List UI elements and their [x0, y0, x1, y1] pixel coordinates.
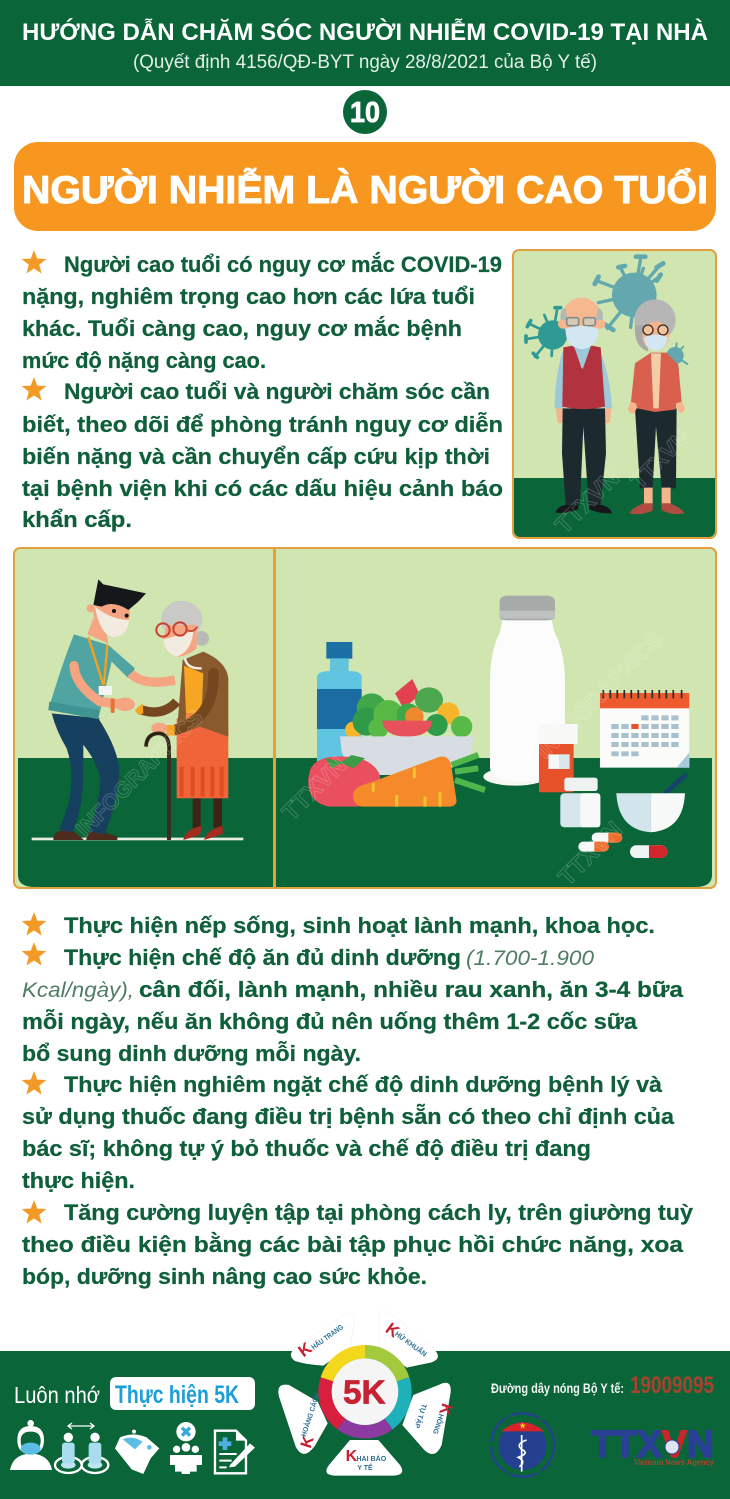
- pill bottle: [560, 778, 600, 827]
- tomato and carrot: [308, 755, 485, 807]
- star bullet: [22, 1071, 46, 1094]
- wheel ring: [325, 1352, 405, 1432]
- advice text block: cân đối, lành mạnh, nhiều rau xanh, ăn 3-4 bữa: [139, 977, 684, 1002]
- hotline: Đường dây nóng Bộ Y tế:: [491, 1380, 624, 1396]
- watermarks: INFOGRAPHICS: [531, 627, 668, 764]
- subtitle: (Quyết định 4156/QĐ-BYT ngày 28/8/2021 của Bộ Y tế): [133, 52, 597, 73]
- milk bottle: [483, 596, 565, 786]
- advice text block: Thực hiện nếp sống, sinh hoạt lành mạnh, khoa học.: [64, 913, 655, 938]
- section banner: [14, 142, 716, 231]
- star bullet: [22, 250, 46, 274]
- petal: Không tụ tập: HÔNG: [431, 1413, 446, 1435]
- mortar and pestle: [616, 776, 685, 832]
- footer band: [0, 1351, 730, 1499]
- panel: elderly couple: [513, 250, 716, 538]
- petal: Khoảng cách: K: [298, 1434, 318, 1450]
- virus right: [666, 343, 687, 370]
- advice text block: (1.700-1.900: [466, 947, 594, 970]
- petal: Khai báo y tế: [326, 1440, 402, 1476]
- icon: hand washing: [115, 1430, 159, 1474]
- logo: TTXVN: Vietnam News Agency: [634, 1458, 715, 1467]
- petal: Khoảng cách: [278, 1385, 328, 1454]
- virus left: [526, 308, 567, 357]
- grandmother: [628, 299, 685, 514]
- main title: HƯỚNG DẪN CHĂM SÓC NGƯỜI NHIỄM COVID-19 TẠI NHÀ: [22, 17, 708, 46]
- advice text block: Thực hiện nghiêm ngặt chế độ dinh dưỡng bệnh lý và: [64, 1072, 662, 1097]
- star bullet: [22, 942, 46, 966]
- petal: Không tụ tập: TỤ TẬP: [413, 1403, 429, 1430]
- star bullet: [22, 1200, 46, 1224]
- salad bowl: [340, 679, 473, 775]
- intro text block: Người cao tuổi và người chăm sóc cần: [64, 379, 490, 404]
- watermarks: TTXVN: [550, 465, 625, 539]
- petal: Khai báo y tế: HAI BÁO: [356, 1454, 387, 1463]
- icon: woman with mask: [10, 1420, 52, 1470]
- scene: healthy food, milk and medicine: [308, 596, 689, 858]
- scene: caregiver helping elderly woman: [32, 579, 243, 840]
- watermarks: TTXVN: [277, 752, 352, 826]
- watermarks: [71, 425, 695, 891]
- section banner: NGƯỜI NHIỄM LÀ NGƯỜI CAO TUỔI: [22, 167, 708, 212]
- advice text block: [22, 912, 693, 1289]
- icon: health declaration form: [215, 1431, 255, 1473]
- advice text block: bóp, dưỡng sinh nâng cao sức khỏe.: [22, 1264, 427, 1289]
- petal: Không tụ tập: [402, 1383, 455, 1454]
- header band: [0, 0, 730, 86]
- petal: Khai báo y tế: K: [346, 1448, 358, 1465]
- capsules: [578, 833, 667, 858]
- hotline: [491, 1372, 714, 1399]
- intro text block: mức độ nặng càng cao.: [22, 348, 266, 373]
- 5K wheel with petals: [278, 1312, 455, 1476]
- number badge 10: [343, 90, 387, 134]
- panel: care and nutrition scenes: [14, 425, 716, 891]
- advice text block: bổ sung dinh dưỡng mỗi ngày.: [22, 1041, 361, 1066]
- star bullet: [22, 377, 46, 400]
- petal: Khoảng cách: HOẢNG CÁCH: [299, 1392, 321, 1438]
- grandfather: [555, 298, 612, 513]
- advice text block: Tăng cường luyện tập tại phòng cách ly, trên giường tuỳ: [64, 1200, 693, 1225]
- number badge 10: 10: [350, 97, 380, 129]
- petal: Khẩu trang: [291, 1314, 354, 1366]
- intro text block: [22, 250, 503, 532]
- 5K pill: Thực hiện 5K: [115, 1381, 239, 1409]
- calendar: [600, 690, 689, 768]
- petal: Khẩu trang: HẨU TRANG: [310, 1322, 345, 1352]
- advice text block: mỗi ngày, nếu ăn không đủ nên uống thêm 1-2 cốc sữa: [22, 1009, 637, 1034]
- intro text block: biết, theo dõi để phòng tránh nguy cơ diễn: [22, 412, 503, 437]
- petal: Khử khuẩn: K: [382, 1319, 403, 1341]
- advice text block: bác sĩ; không tự ý bỏ thuốc và chế độ điều trị đang: [22, 1136, 591, 1161]
- icon: no gathering: [170, 1422, 202, 1474]
- petal: Khử khuẩn: HỬ KHUẨN: [393, 1329, 429, 1359]
- watermarks: INFOGRAPHICS: [71, 705, 208, 842]
- icon: keep distance: [55, 1423, 108, 1473]
- advice text block: theo điều kiện bằng các bài tập phục hồi chức năng, xoa: [22, 1232, 684, 1257]
- wheel centre 5K: 5K: [343, 1375, 386, 1412]
- water bottle: [317, 642, 362, 762]
- wheel centre 5K: [332, 1358, 398, 1425]
- reminder label: Luôn nhớ: [14, 1382, 100, 1408]
- logo: Ministry of Health: [491, 1413, 554, 1477]
- logo: TTXVN: TTXVN: [591, 1424, 714, 1466]
- advice text block: thực hiện.: [22, 1168, 135, 1193]
- star bullet: [22, 912, 46, 936]
- intro text block: nặng, nghiêm trọng cao hơn các lứa tuổi: [22, 284, 475, 309]
- advice text block: sử dụng thuốc đang điều trị bệnh sẵn có theo chỉ định của: [22, 1104, 675, 1129]
- petal: Không tụ tập: K: [435, 1401, 455, 1418]
- intro text block: Người cao tuổi có nguy cơ mắc COVID-19: [64, 252, 502, 277]
- 5K icons row: [10, 1420, 255, 1474]
- virus large: [595, 257, 663, 330]
- advice text block: Thực hiện chế độ ăn đủ dinh dưỡng: [64, 945, 461, 970]
- watermarks: TTXVN: [626, 425, 695, 494]
- petal: Khẩu trang: K: [295, 1338, 315, 1361]
- intro text block: biến nặng và cần chuyển cấp cứu kịp thời: [22, 444, 490, 469]
- intro text block: tại bệnh viện khi có các dấu hiệu cảnh báo: [22, 476, 503, 501]
- medicine box: [538, 724, 578, 792]
- petal: Khử khuẩn: [380, 1312, 438, 1368]
- watermarks: TTXVN: [553, 817, 628, 891]
- intro text block: khác. Tuổi càng cao, nguy cơ mắc bệnh: [22, 316, 462, 341]
- intro text block: khẩn cấp.: [22, 507, 132, 532]
- petal: Khai báo y tế: Y TẾ: [357, 1462, 373, 1472]
- advice text block: Kcal/ngày),: [22, 979, 134, 1002]
